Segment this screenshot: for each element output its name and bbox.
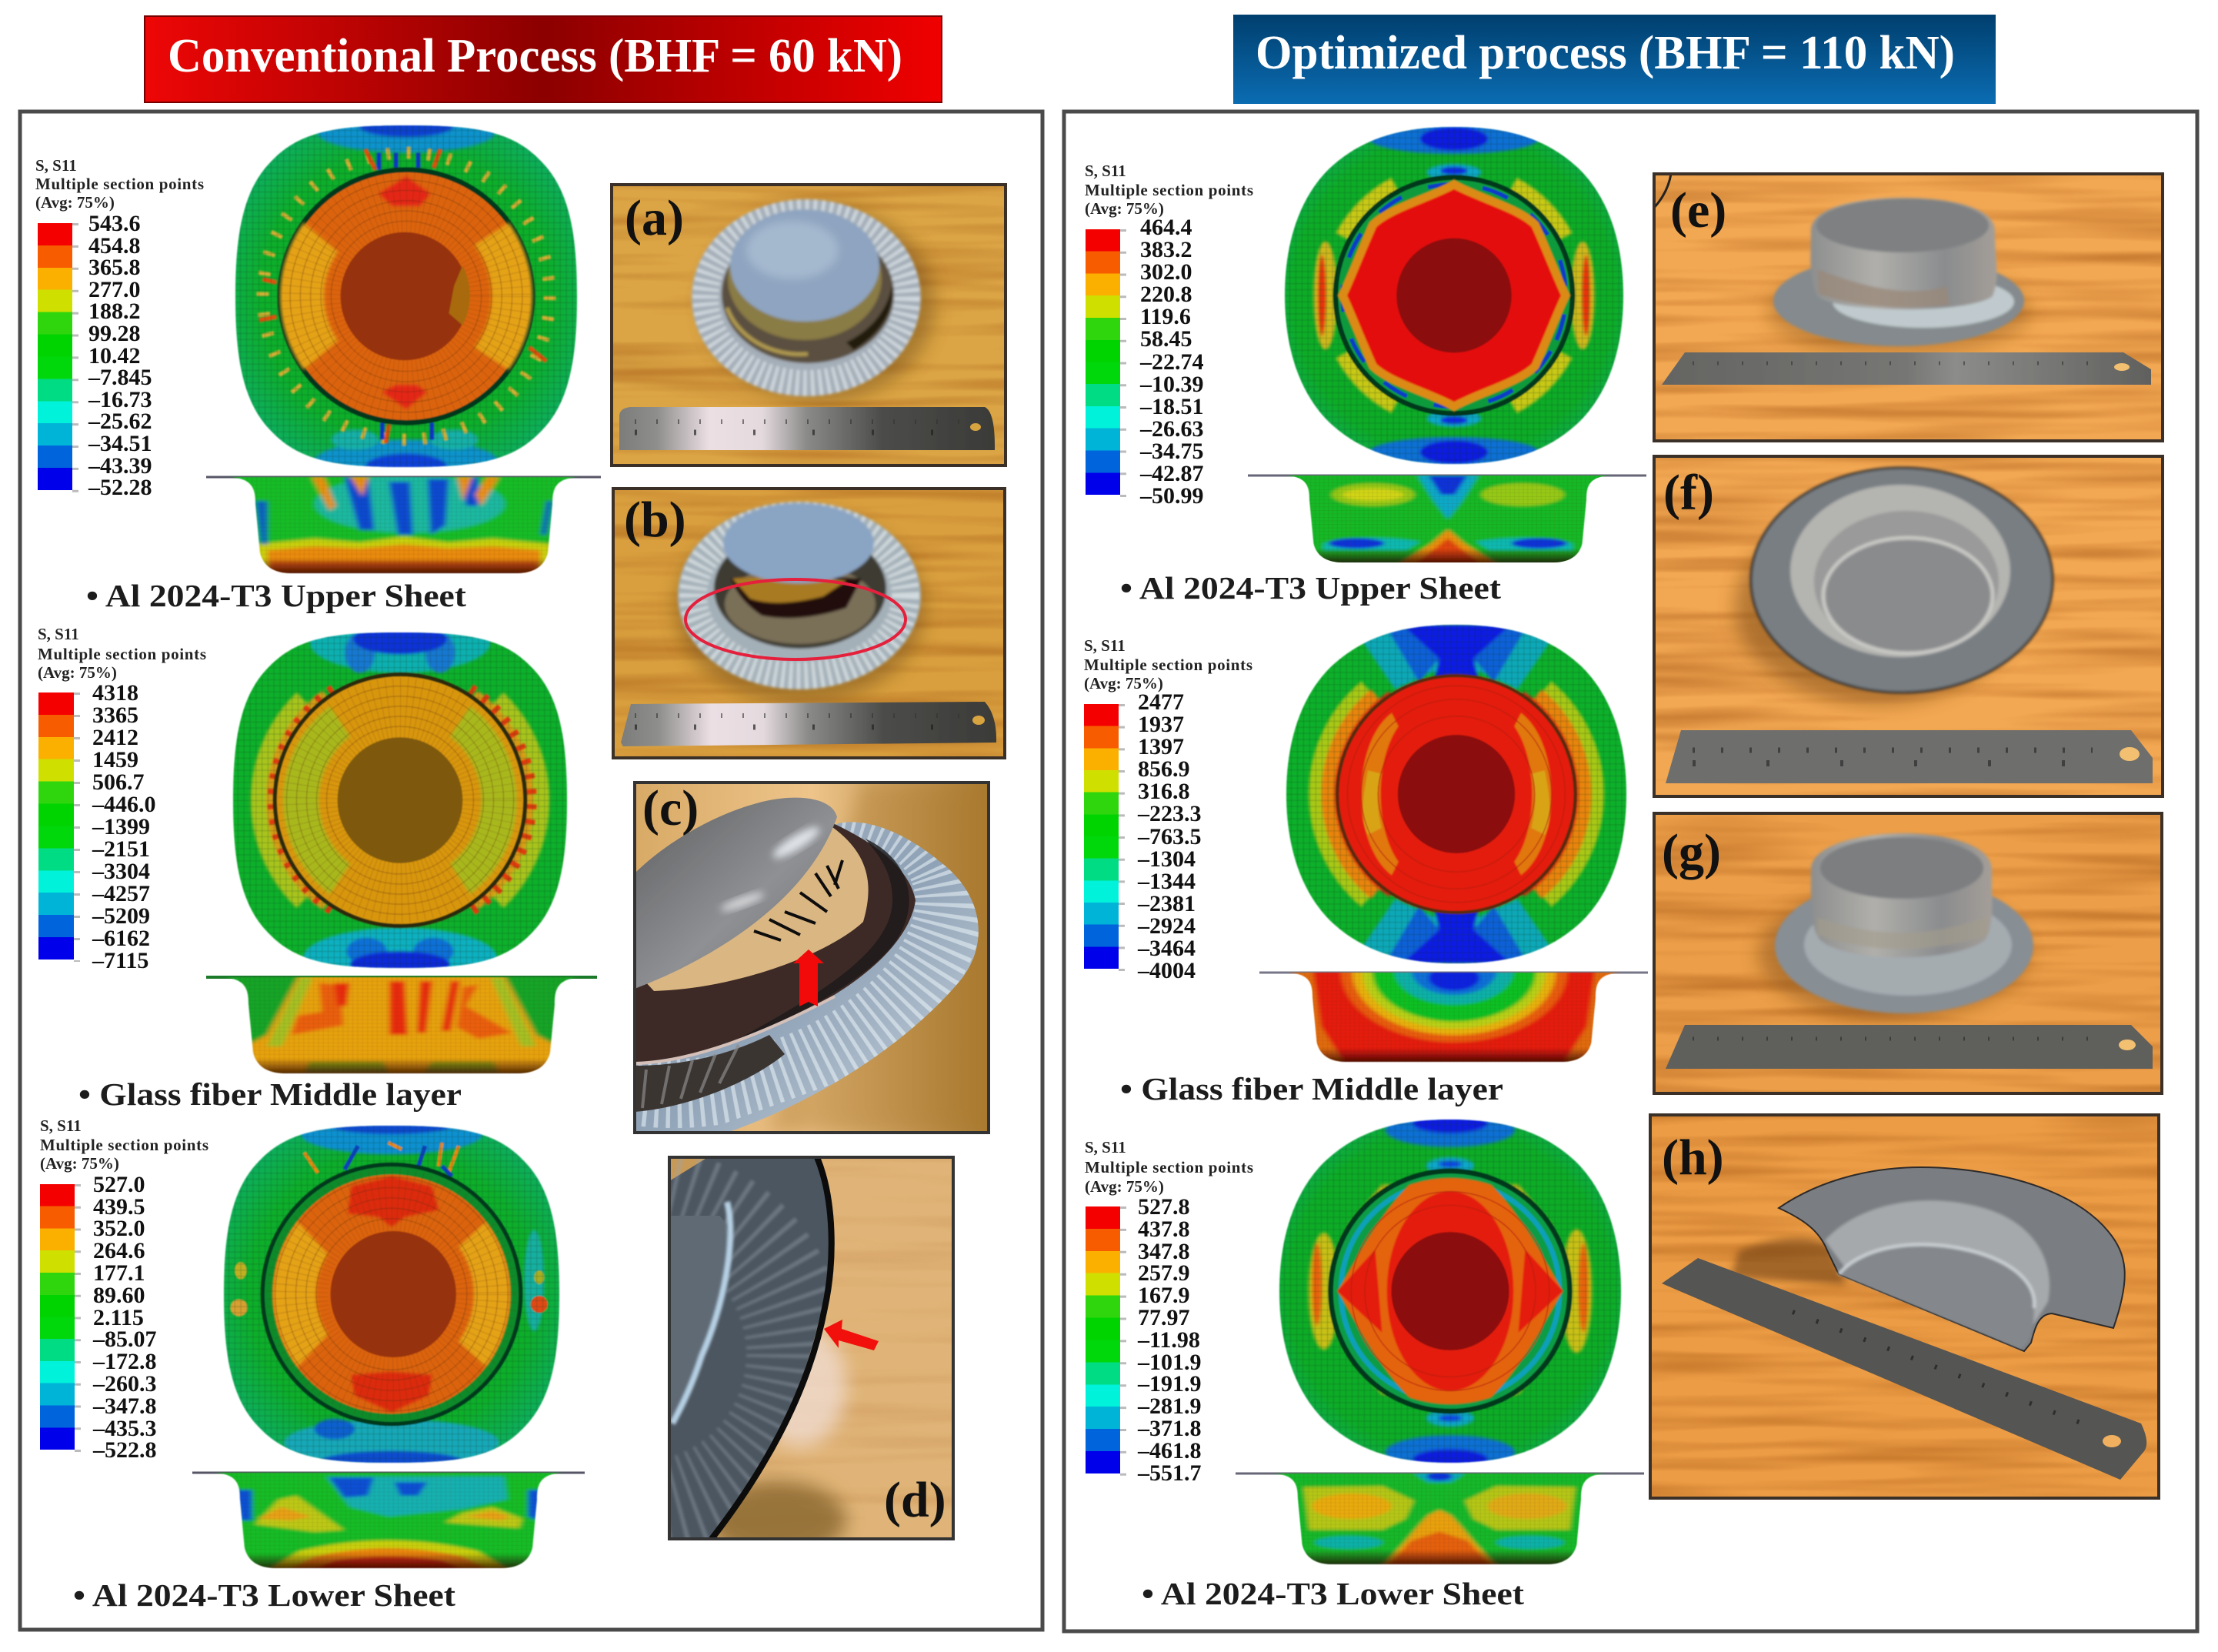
legend: upper sheet optimized: –34.75 — [1139, 439, 1203, 464]
legend: lower sheet conventional: 439.5 — [93, 1194, 145, 1220]
photo (a): formed part with wrinkled flange — [612, 185, 1006, 466]
legend: lower sheet conventional: –172.8 — [92, 1349, 157, 1374]
photo (e): formed cup upright: (e) — [1670, 182, 1726, 239]
photo (g): formed cup upright, lower sheet: (g) — [1662, 824, 1721, 880]
banner: optimized process: Optimized process (BHF = 110 kN) — [1256, 27, 1955, 79]
legend: middle layer optimized: S, S11 — [1084, 636, 1126, 655]
legend: upper sheet conventional: –7.845 — [88, 365, 152, 390]
legend: lower sheet optimized: 437.8 — [1138, 1216, 1189, 1242]
legend: lower sheet optimized: (Avg: 75%) — [1085, 1177, 1164, 1196]
legend: upper sheet optimized: Multiple section points — [1085, 181, 1253, 199]
legend: lower sheet optimized: –461.8 — [1137, 1438, 1202, 1463]
legend: lower sheet optimized: 167.9 — [1138, 1283, 1189, 1308]
legend: upper sheet optimized — [1085, 162, 1253, 509]
legend: lower sheet optimized: 347.8 — [1138, 1239, 1189, 1264]
legend: upper sheet optimized: 119.6 — [1140, 304, 1191, 329]
label: middle layer optimized: • Glass fiber Middle layer — [1120, 1071, 1503, 1106]
legend: lower sheet optimized: 257.9 — [1138, 1260, 1189, 1286]
legend: lower sheet optimized: S, S11 — [1085, 1138, 1126, 1156]
legend: upper sheet optimized: 464.4 — [1140, 215, 1192, 240]
legend: middle layer conventional: –2151 — [92, 836, 150, 862]
legend: upper sheet conventional: 365.8 — [88, 255, 140, 280]
legend: lower sheet conventional: S, S11 — [40, 1116, 82, 1135]
legend: middle layer conventional: Multiple section points — [38, 645, 206, 663]
FEA side view: lower sheet conventional — [192, 1468, 585, 1573]
label: lower sheet conventional: • Al 2024-T3 Lower Sheet — [73, 1577, 455, 1613]
legend: lower sheet optimized: –551.7 — [1137, 1460, 1202, 1486]
legend: upper sheet conventional: –43.39 — [88, 453, 152, 479]
legend: middle layer conventional: 3365 — [92, 703, 138, 728]
legend: lower sheet conventional: –435.3 — [92, 1416, 157, 1441]
photo (b): formed part with fracture circled — [613, 489, 1005, 758]
legend: upper sheet conventional: –34.51 — [88, 431, 152, 456]
legend: middle layer optimized: –1344 — [1137, 869, 1196, 894]
label: upper sheet conventional: • Al 2024-T3 Upper Sheet — [86, 578, 466, 613]
legend: lower sheet conventional: (Avg: 75%) — [40, 1154, 119, 1173]
label: middle layer conventional: • Glass fiber Middle layer — [78, 1076, 462, 1112]
legend: middle layer optimized: –4004 — [1137, 958, 1196, 983]
legend: middle layer conventional: 2412 — [92, 725, 138, 750]
photo (b): formed part with fracture circled: (b) — [624, 492, 686, 548]
FEA top view: middle layer conventional — [233, 612, 567, 988]
photo (e): formed cup upright — [1654, 174, 2163, 441]
FEA top view: upper sheet conventional — [235, 112, 577, 484]
legend: upper sheet optimized: –50.99 — [1139, 483, 1203, 509]
legend: middle layer conventional: –446.0 — [92, 792, 155, 817]
legend: lower sheet optimized: –11.98 — [1137, 1327, 1200, 1353]
legend: upper sheet conventional: S, S11 — [35, 156, 77, 175]
legend: lower sheet conventional — [40, 1116, 208, 1463]
legend: middle layer conventional: –6162 — [92, 926, 150, 951]
legend: upper sheet optimized: 58.45 — [1140, 326, 1192, 352]
legend: upper sheet conventional: Multiple section points — [35, 175, 204, 193]
photo (f): formed cup inverted — [1654, 456, 2163, 796]
legend: middle layer conventional: 1459 — [92, 747, 138, 773]
legend: upper sheet conventional: 188.2 — [88, 299, 140, 324]
photo (c): close-up of fracture: (c) — [642, 780, 699, 836]
banner: conventional process: Conventional Process (BHF = 60 kN) — [168, 30, 902, 82]
legend: lower sheet conventional: –85.07 — [92, 1327, 157, 1352]
legend: lower sheet optimized: –281.9 — [1137, 1393, 1202, 1419]
FEA side view: upper sheet optimized — [1248, 471, 1646, 567]
legend: upper sheet optimized: 383.2 — [1140, 237, 1192, 262]
legend: lower sheet conventional: 352.0 — [93, 1216, 145, 1241]
legend: upper sheet conventional: 10.42 — [88, 343, 140, 369]
legend: middle layer optimized: 856.9 — [1138, 756, 1189, 782]
label: lower sheet optimized: • Al 2024-T3 Lower Sheet — [1142, 1576, 1524, 1611]
legend: middle layer optimized: 316.8 — [1138, 779, 1189, 804]
legend: upper sheet conventional: 277.0 — [88, 277, 140, 302]
legend: middle layer optimized: –1304 — [1137, 846, 1196, 872]
FEA side view: lower sheet optimized — [1236, 1469, 1644, 1569]
legend: middle layer conventional: 506.7 — [92, 769, 145, 795]
legend: lower sheet conventional: 527.0 — [93, 1172, 145, 1197]
FEA top view: middle layer optimized — [1286, 625, 1626, 963]
legend: lower sheet optimized — [1085, 1138, 1253, 1486]
legend: upper sheet conventional: 543.6 — [88, 211, 140, 236]
legend: middle layer conventional: S, S11 — [38, 625, 79, 643]
legend: upper sheet optimized: S, S11 — [1085, 162, 1126, 180]
legend: lower sheet conventional: –260.3 — [92, 1371, 157, 1397]
legend: middle layer optimized: 1397 — [1138, 734, 1184, 759]
legend: lower sheet optimized: –101.9 — [1137, 1350, 1202, 1375]
legend: upper sheet optimized: –42.87 — [1139, 461, 1203, 486]
photo (a): formed part with wrinkled flange: (a) — [625, 190, 684, 246]
legend: upper sheet optimized: –22.74 — [1139, 349, 1203, 375]
legend: lower sheet conventional: 2.115 — [93, 1305, 144, 1330]
legend: middle layer conventional: –5209 — [92, 903, 150, 929]
legend: middle layer optimized: –2924 — [1137, 913, 1196, 939]
legend: middle layer optimized: –223.3 — [1137, 801, 1202, 826]
legend: middle layer conventional: –7115 — [92, 948, 148, 973]
photo (f): formed cup inverted: (f) — [1663, 465, 1714, 521]
legend: lower sheet optimized: Multiple section points — [1085, 1158, 1253, 1176]
legend: upper sheet optimized: –26.63 — [1139, 416, 1203, 442]
legend: lower sheet conventional: 264.6 — [93, 1238, 145, 1263]
panel: optimized process — [1064, 112, 2197, 1631]
legend: lower sheet optimized: –371.8 — [1137, 1416, 1202, 1441]
FEA top view: lower sheet conventional — [224, 1114, 559, 1474]
legend: middle layer optimized: –763.5 — [1137, 824, 1202, 849]
photo (h): sectioned cup with ruler: (h) — [1662, 1130, 1724, 1186]
legend: upper sheet conventional — [35, 156, 204, 500]
photo (c): close-up of fracture — [633, 781, 990, 1134]
legend: upper sheet conventional: 454.8 — [88, 233, 140, 259]
legend: upper sheet optimized: 220.8 — [1140, 282, 1192, 307]
legend: lower sheet optimized: –191.9 — [1137, 1371, 1202, 1397]
photo (g): formed cup upright, lower sheet — [1654, 813, 2162, 1093]
legend: lower sheet conventional: 177.1 — [93, 1260, 145, 1286]
legend: middle layer optimized: –2381 — [1137, 891, 1196, 916]
legend: upper sheet optimized: (Avg: 75%) — [1085, 199, 1164, 218]
legend: middle layer conventional: –1399 — [92, 814, 150, 839]
legend: lower sheet conventional: 89.60 — [93, 1283, 145, 1308]
legend: middle layer optimized: 1937 — [1138, 712, 1184, 737]
legend: upper sheet conventional: –16.73 — [88, 387, 152, 412]
legend: middle layer optimized — [1084, 636, 1252, 983]
legend: upper sheet optimized: 302.0 — [1140, 259, 1192, 285]
FEA side view: upper sheet conventional — [206, 472, 601, 578]
FEA side view: middle layer conventional — [206, 973, 597, 1078]
legend: middle layer conventional: 4318 — [92, 680, 138, 706]
FEA side view: middle layer optimized — [1259, 899, 1648, 1066]
FEA top view: lower sheet optimized — [1279, 1113, 1621, 1470]
label: upper sheet optimized: • Al 2024-T3 Upper Sheet — [1120, 570, 1501, 606]
legend: middle layer optimized: Multiple section points — [1084, 656, 1252, 674]
legend: middle layer optimized: 2477 — [1138, 689, 1184, 715]
legend: upper sheet conventional: (Avg: 75%) — [35, 193, 115, 212]
legend: middle layer conventional: (Avg: 75%) — [38, 663, 117, 682]
legend: upper sheet conventional: 99.28 — [88, 321, 140, 346]
legend: upper sheet conventional: –52.28 — [88, 475, 152, 500]
legend: middle layer conventional — [38, 625, 206, 973]
FEA top view: upper sheet optimized — [1285, 124, 1623, 467]
legend: middle layer conventional: –3304 — [92, 859, 150, 884]
photo (d): close-up of flange edge: (d) — [884, 1472, 946, 1528]
legend: lower sheet optimized: 77.97 — [1138, 1305, 1189, 1330]
photo (h): sectioned cup with ruler — [1650, 1115, 2159, 1498]
legend: lower sheet conventional: –522.8 — [92, 1437, 157, 1463]
legend: upper sheet optimized: –10.39 — [1139, 372, 1203, 397]
banner: conventional process — [145, 16, 942, 102]
photo (d): close-up of flange edge — [668, 1156, 955, 1540]
panel: conventional process — [20, 112, 1042, 1630]
legend: lower sheet conventional: –347.8 — [92, 1393, 157, 1419]
banner: optimized process — [1233, 15, 1996, 104]
legend: lower sheet conventional: Multiple section points — [40, 1136, 208, 1154]
legend: lower sheet optimized: 527.8 — [1138, 1194, 1189, 1220]
legend: upper sheet optimized: –18.51 — [1139, 394, 1203, 419]
legend: upper sheet conventional: –25.62 — [88, 409, 152, 434]
legend: middle layer optimized: (Avg: 75%) — [1084, 674, 1163, 693]
legend: middle layer conventional: –4257 — [92, 881, 150, 906]
legend: middle layer optimized: –3464 — [1137, 936, 1196, 961]
